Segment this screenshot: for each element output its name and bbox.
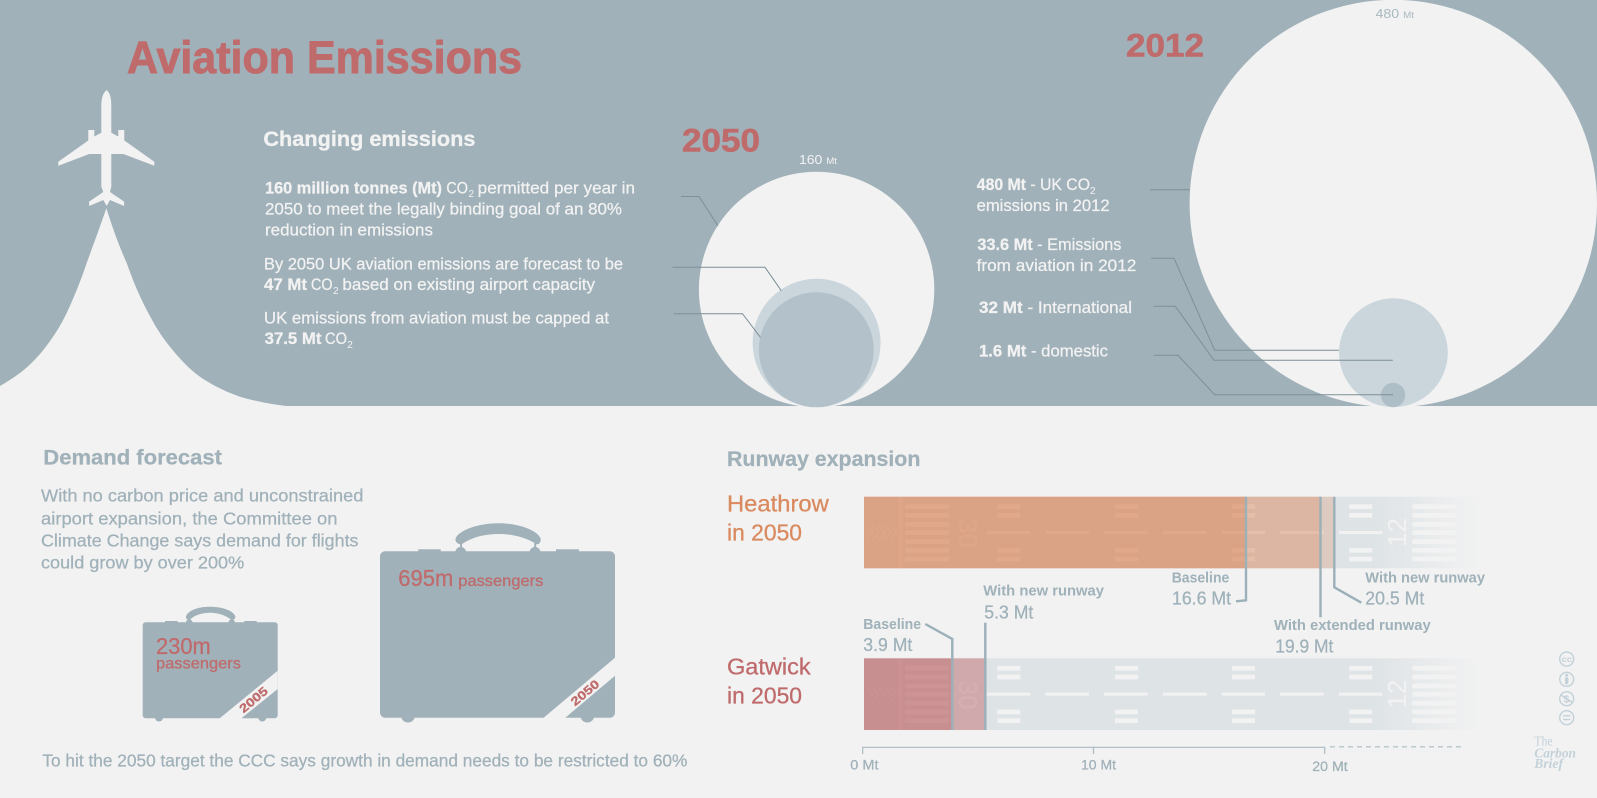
- axis labels: 0 Mt: [850, 757, 879, 772]
- text block: forecast 47 Mt: CO: [311, 276, 333, 294]
- label: Gatwick baseline 3.9 Mt: [863, 616, 921, 655]
- text block: 480 Mt UK CO2: emissions in 2012: [977, 197, 1110, 215]
- label: Gatwick in 2050: Gatwick: [727, 653, 811, 679]
- label: Gatwick with new runway 5.3 Mt: [983, 583, 1105, 623]
- axis labels: 10 Mt: [1081, 757, 1116, 772]
- text block: forecast 47 Mt: 2: [333, 286, 339, 297]
- heading: 2050: 2050: [682, 123, 760, 159]
- text block: 160 million tonnes: [265, 179, 635, 239]
- label: 230m passengers: [156, 633, 241, 672]
- text block: cap 37.5 Mt: 2: [347, 340, 353, 351]
- label: Heathrow with new runway 20.5 Mt: [1365, 570, 1486, 609]
- text block: 480 Mt UK CO2: 2: [1090, 186, 1096, 197]
- icon: large suitcase 2050: [380, 523, 615, 722]
- label: Heathrow in 2050: in 2050: [727, 520, 802, 546]
- text block: 480 Mt UK CO2: [977, 176, 1110, 215]
- label: Heathrow baseline 16.6 Mt: 16.6 Mt: [1172, 589, 1231, 609]
- label: 480 Mt: 480 Mt: [1376, 6, 1415, 21]
- circle: 1.6 Mt domestic: [1381, 383, 1405, 407]
- label: Gatwick baseline 3.9 Mt: 3.9 Mt: [863, 635, 912, 655]
- text block: demand intro: could grow by over 200%: [41, 552, 244, 572]
- axis: [850, 747, 1463, 774]
- circle: 160 Mt total: [699, 172, 934, 407]
- chart: Heathrow runway bar: [864, 497, 1483, 568]
- circle: 47 Mt aviation forecast: [753, 279, 881, 407]
- label: Gatwick in 2050: in 2050: [727, 682, 802, 708]
- label: Gatwick with new runway 5.3 Mt: With new runway: [983, 583, 1105, 600]
- text block: 32 Mt international: 32 Mt - International: [979, 299, 1132, 317]
- axis labels: [850, 757, 1348, 774]
- text block: demand intro: airport expansion, the Committee on: [41, 508, 338, 528]
- text block: 160 million tonnes: 160 million tonnes (Mt): [265, 179, 442, 197]
- logo: The Carbon Brief: Carbon: [1534, 745, 1576, 760]
- label: 695m passengers: passengers: [458, 573, 543, 590]
- text block: forecast 47 Mt: 47 Mt: [264, 276, 308, 294]
- label: Heathrow with extended runway 19.9 Mt: 19.9 Mt: [1275, 637, 1333, 657]
- panel: runway expansion: [727, 447, 1486, 774]
- bar: new runway 20.5 Mt: [1320, 497, 1334, 568]
- title: Aviation Emissions: [127, 32, 522, 83]
- logo: The Carbon Brief: [1533, 734, 1576, 771]
- top panel: changing emissions band: [0, 0, 1597, 406]
- runway number 30: 30: [953, 681, 983, 710]
- text block: 160 million tonnes: 2: [468, 189, 474, 200]
- text block: 33.6 Mt aviation: from aviation in 2012: [977, 257, 1136, 275]
- heading: demand forecast: Demand forecast: [43, 446, 222, 470]
- text block: forecast 47 Mt: [264, 255, 623, 297]
- text block: 480 Mt UK CO2: 480 Mt - UK CO: [977, 176, 1090, 194]
- chart: 2050 circles: [672, 123, 934, 407]
- text block: demand intro: Climate Change says demand for flights: [41, 531, 359, 551]
- heading: changing emissions: Changing emissions: [263, 127, 475, 151]
- label: 2005: 2005: [236, 684, 271, 716]
- marker lines: [925, 497, 1361, 730]
- text block: cap 37.5 Mt: [264, 309, 609, 351]
- text block: demand intro: [41, 486, 363, 572]
- text block: 160 million tonnes: permitted per year in: [478, 179, 635, 197]
- runway number 12: 12: [1382, 518, 1412, 547]
- text block: forecast 47 Mt: based on existing airport capacity: [342, 276, 596, 294]
- chart: Gatwick runway bar: [864, 658, 1483, 730]
- text block: cap 37.5 Mt: CO: [325, 330, 347, 348]
- contrail: [0, 208, 293, 407]
- text block: forecast 47 Mt: By 2050 UK aviation emissions are forecast to be: [264, 255, 623, 273]
- circle: 37.5 Mt aviation cap: [759, 292, 874, 407]
- label: 2050: 2050: [568, 677, 603, 709]
- label: Gatwick with new runway 5.3 Mt: 5.3 Mt: [984, 603, 1033, 623]
- panel: changing emissions text: [263, 127, 635, 351]
- bar: extended runway 19.9 Mt: [1246, 497, 1320, 568]
- heading: runway expansion: Runway expansion: [727, 447, 920, 471]
- text block: 160 million tonnes: CO: [446, 179, 468, 197]
- bar: baseline 16.6 Mt: [864, 497, 1246, 568]
- label: Heathrow baseline 16.6 Mt: Baseline: [1172, 570, 1229, 587]
- label: 230m passengers: 230m: [156, 633, 211, 659]
- text block: restricted to 60%: To hit the 2050 target the CCC says growth in demand needs to be restricted to 60%: [42, 751, 687, 771]
- circle: 480 Mt total: [1190, 0, 1597, 407]
- text block: demand intro: With no carbon price and unconstrained: [41, 486, 363, 506]
- label: Gatwick in 2050: [727, 653, 811, 708]
- bar: baseline 3.9 Mt: [864, 658, 952, 730]
- heading: 2012: 2012: [1126, 28, 1204, 64]
- label: Heathrow baseline 16.6 Mt: [1172, 570, 1231, 609]
- axis labels: 20 Mt: [1312, 759, 1348, 774]
- logo: The Carbon Brief: The: [1534, 734, 1553, 749]
- label: Heathrow with new runway 20.5 Mt: 20.5 Mt: [1365, 589, 1424, 609]
- label: 695m passengers: [398, 565, 543, 591]
- label: 230m passengers: passengers: [156, 655, 241, 672]
- text block: 160 million tonnes: 2050 to meet the legally binding goal of an 80%: [265, 200, 622, 218]
- label: Heathrow with extended runway 19.9 Mt: [1274, 617, 1431, 657]
- circle: 33.6 Mt aviation: [1339, 298, 1448, 407]
- label: Heathrow in 2050: Heathrow: [727, 491, 829, 517]
- bar: new runway 5.3 Mt: [952, 658, 985, 730]
- panel: demand forecast: [41, 446, 687, 771]
- icons: creative commons licence: [1560, 652, 1574, 725]
- icon: aeroplane: [58, 90, 154, 206]
- runway number 30: 30: [953, 519, 983, 548]
- label: Gatwick baseline 3.9 Mt: Baseline: [863, 616, 921, 633]
- label: 160 Mt: 160 Mt: [799, 152, 838, 167]
- leader lines 2012: [1150, 190, 1393, 395]
- chart: 2012 circles: [977, 0, 1597, 407]
- text block: 160 million tonnes: reduction in emissions: [265, 221, 433, 239]
- leader lines 2050: [672, 196, 781, 337]
- icons: creative commons licence: cc: [1562, 654, 1572, 664]
- text block: cap 37.5 Mt: 37.5 Mt: [265, 330, 322, 348]
- icon: small suitcase 2005: [143, 607, 278, 722]
- text block: cap 37.5 Mt: UK emissions from aviation must be capped at: [264, 309, 609, 327]
- label: 695m passengers: 695m: [398, 565, 453, 591]
- logo: The Carbon Brief: Brief: [1533, 756, 1565, 771]
- icons: creative commons licence: $: [1564, 694, 1570, 706]
- text block: 33.6 Mt aviation: [977, 236, 1136, 275]
- label: Heathrow with new runway 20.5 Mt: With new runway: [1365, 570, 1486, 587]
- text block: 1.6 Mt domestic: 1.6 Mt - domestic: [979, 343, 1108, 361]
- runway number 12: 12: [1382, 680, 1412, 709]
- text block: 33.6 Mt aviation: 33.6 Mt - Emissions: [977, 236, 1121, 254]
- label: Heathrow in 2050: [727, 491, 829, 546]
- label: Heathrow with extended runway 19.9 Mt: With extended runway: [1274, 617, 1431, 634]
